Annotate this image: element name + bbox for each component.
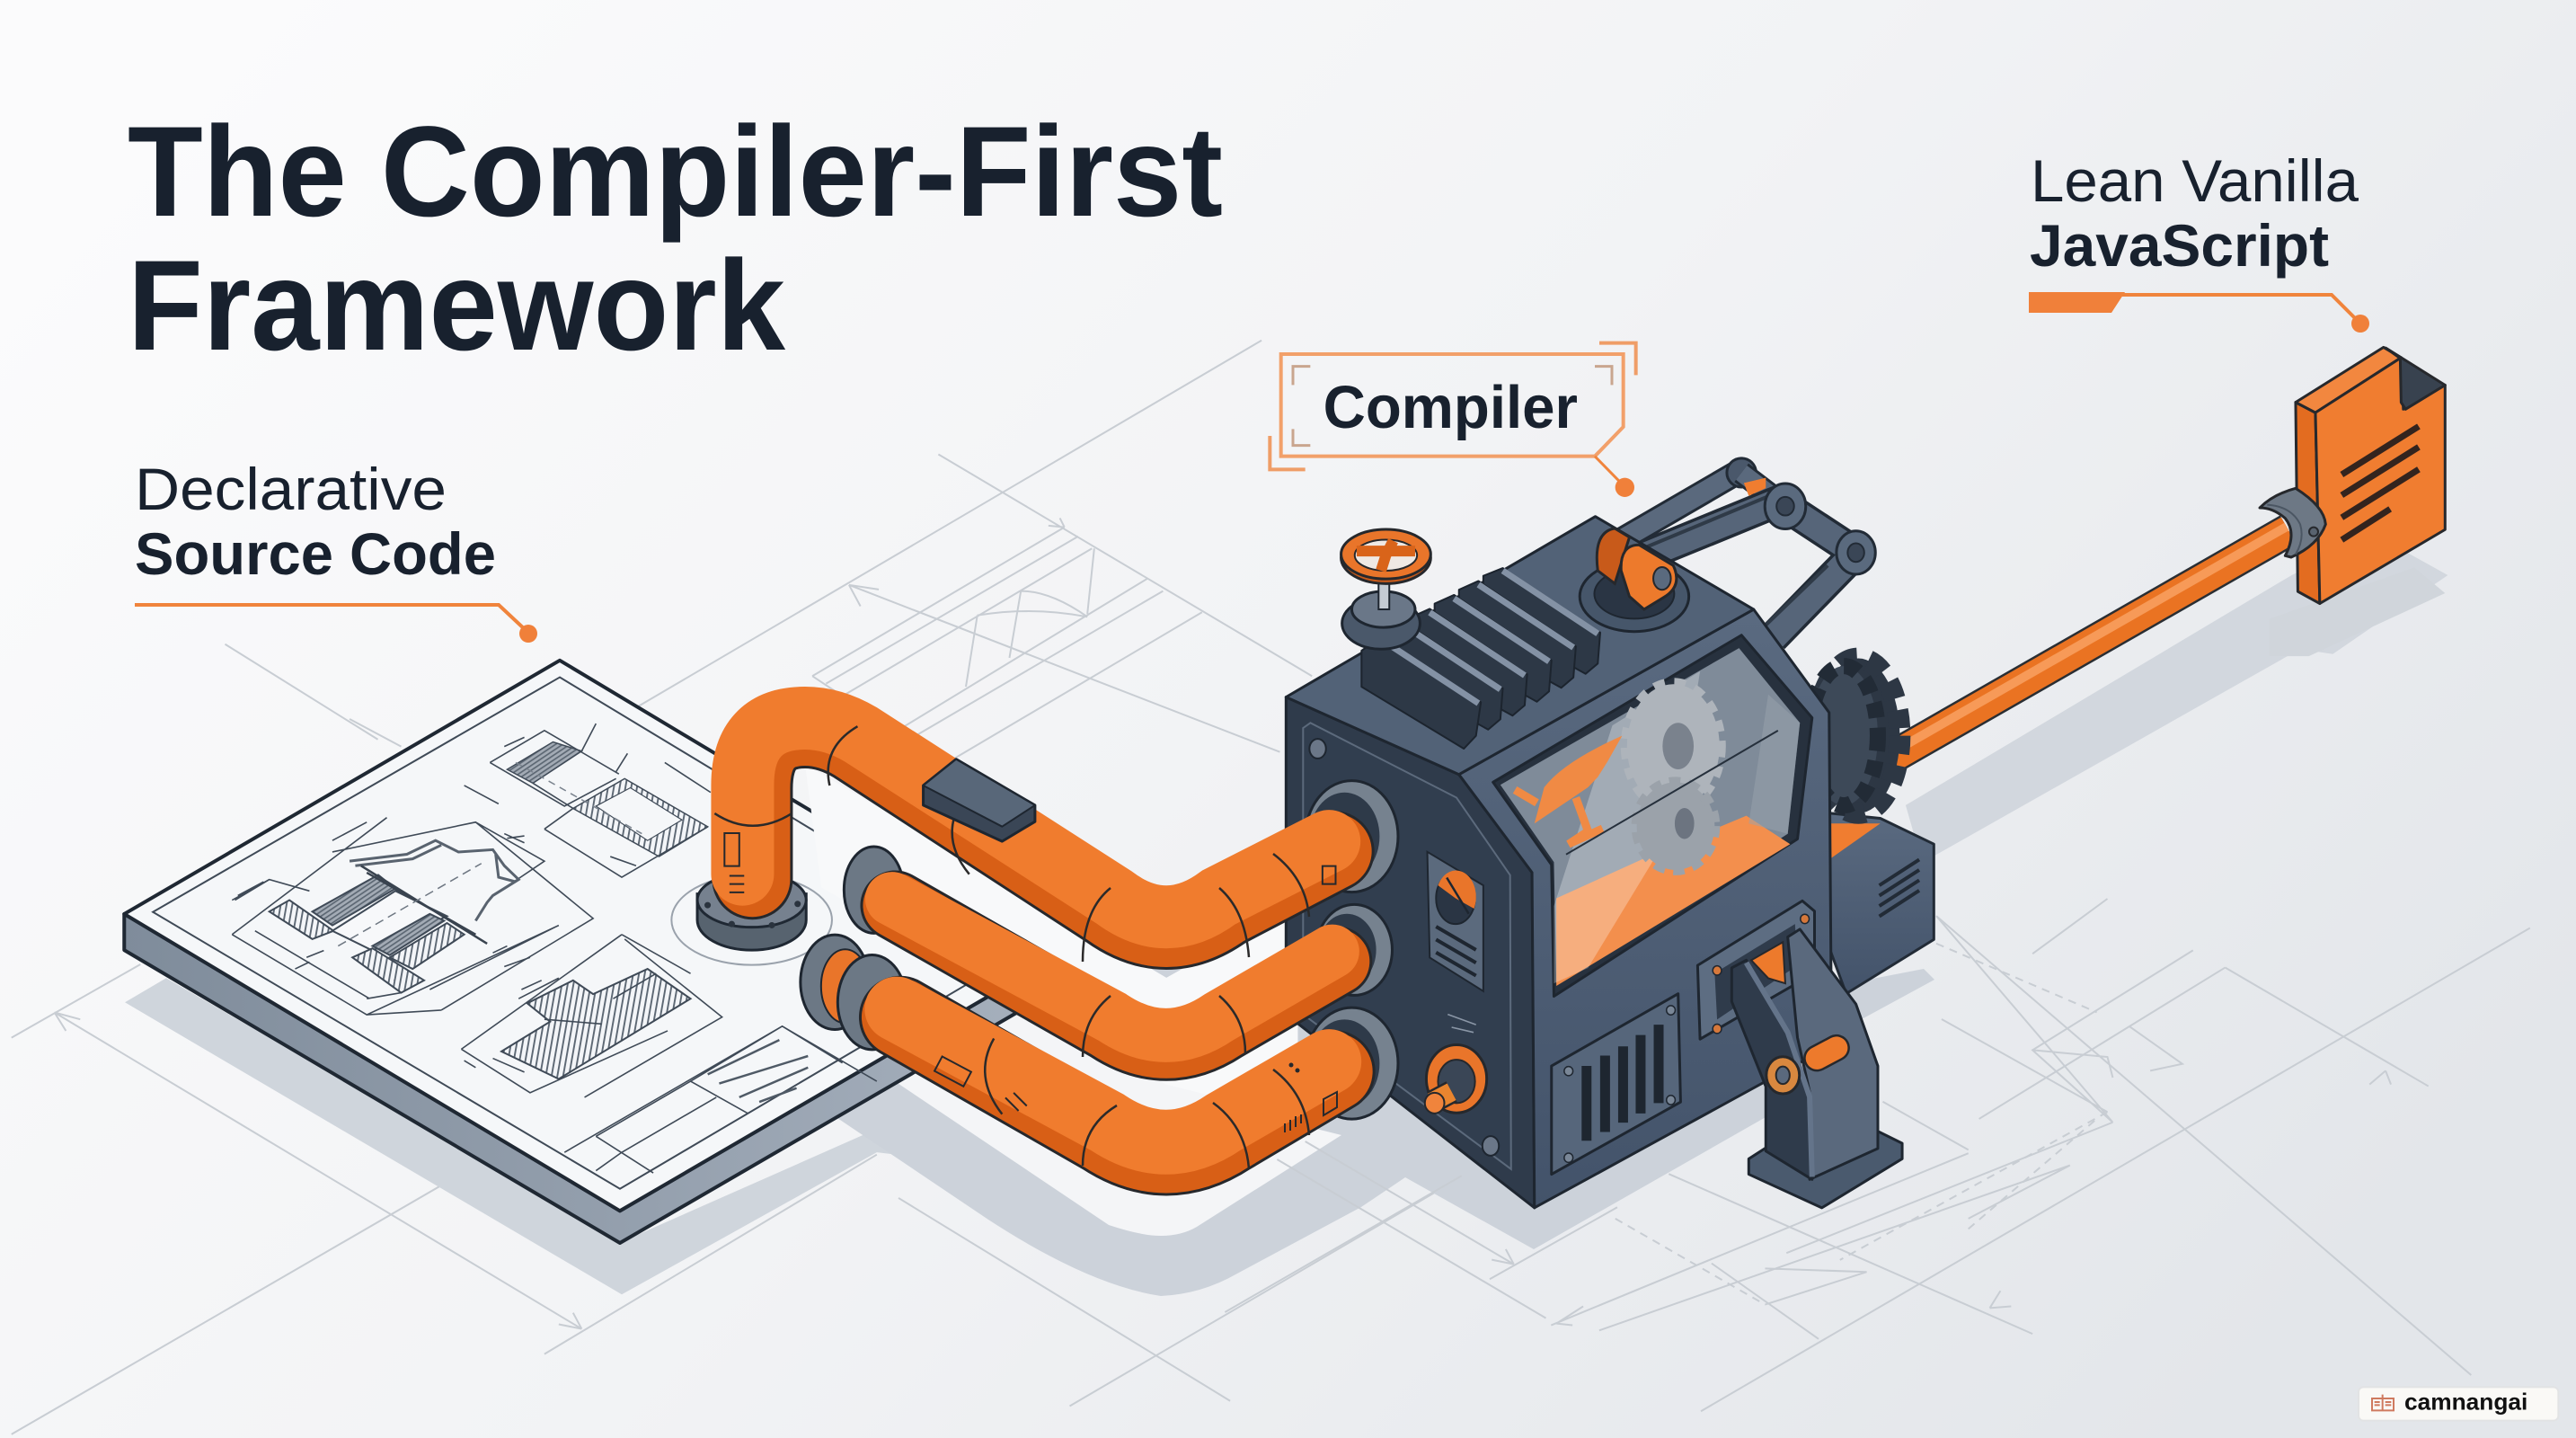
- output document: [2270, 347, 2445, 656]
- shadow: blueprint sheet: [125, 978, 1089, 1294]
- lit gaps between pipes: [805, 764, 1297, 1117]
- panel screws: [1309, 739, 1499, 1156]
- document shadow: [2270, 567, 2445, 656]
- vent grille: [1552, 994, 1680, 1175]
- document top edge: [2296, 347, 2401, 413]
- top actuator: [1580, 528, 1689, 632]
- pipe base flange: [697, 873, 806, 950]
- rear housing: [1829, 813, 1934, 994]
- rod collar: [2260, 488, 2325, 557]
- orange dial knob: [1425, 1044, 1487, 1114]
- window divider: [1566, 731, 1778, 855]
- orange part: [1515, 736, 1622, 844]
- machine: [1286, 458, 1934, 1208]
- pipe: top run: [714, 718, 1335, 929]
- label: Declarative Source Code: [135, 456, 537, 643]
- pipe: middle ring: [844, 847, 904, 933]
- cooling fins: [1361, 568, 1600, 749]
- lever arms: [1731, 929, 1878, 1179]
- watermark: [2359, 1387, 2558, 1421]
- pipe: lower run: [897, 1009, 1334, 1154]
- panel small print: [1447, 1015, 1476, 1033]
- label: Declarative Source Code: Declarative: [135, 456, 447, 522]
- drawing: top right section: [465, 723, 711, 877]
- seams: middle run: [1083, 996, 1245, 1057]
- background drafting lines: [12, 341, 2530, 1434]
- machine top face: [1286, 517, 1754, 775]
- glass highlight: [1554, 671, 1700, 983]
- label: Declarative Source Code: Source Code: [135, 520, 496, 587]
- label: Compiler: [1270, 343, 1636, 497]
- label: Lean Vanilla JavaScript: JavaScript: [2030, 212, 2329, 279]
- output rod: [1858, 527, 2288, 776]
- label: Lean Vanilla JavaScript: [2029, 147, 2369, 333]
- lever pin: [1766, 1048, 1837, 1094]
- sheet surface: [124, 661, 1056, 1211]
- flange: middle port: [1316, 904, 1392, 995]
- rear arm: [1617, 458, 1875, 638]
- blueprint sheet: [124, 661, 1056, 1243]
- floor shadows: [125, 534, 2448, 1296]
- input pipes: [714, 718, 1337, 1168]
- valve wheel: [1341, 529, 1430, 649]
- flange: top port: [1306, 781, 1398, 892]
- title block: [564, 1026, 877, 1173]
- left inset panel: [1303, 723, 1511, 1169]
- title: [128, 101, 1223, 377]
- machine front face: [1459, 609, 1831, 1208]
- upper gear: [1627, 684, 1720, 808]
- shadow: pipes and machine: [788, 899, 1934, 1296]
- title: The Compiler-First: [128, 101, 1223, 244]
- document text lines: [2341, 426, 2419, 540]
- title: Framework: [128, 235, 785, 377]
- seams: top run: [1083, 854, 1309, 962]
- sheet side: [124, 914, 1056, 1243]
- drawing: central section: [232, 818, 593, 1015]
- seams and marks: lower run: [1083, 1062, 1337, 1168]
- shadow: output rod and document: [1906, 534, 2448, 863]
- document side edge: [2296, 403, 2320, 604]
- orange work floor: [1556, 816, 1790, 986]
- watermark: camnangai: [2404, 1388, 2527, 1415]
- label: Lean Vanilla JavaScript: Lean Vanilla: [2031, 147, 2359, 214]
- label: Compiler: Compiler: [1323, 375, 1578, 441]
- lever base: [1748, 1107, 1902, 1208]
- document face: [2315, 358, 2445, 604]
- clamp on top pipe: [924, 759, 1035, 841]
- drawing: lower section: [461, 935, 722, 1097]
- sheet inner border: [153, 678, 1018, 1189]
- lower gear: [1637, 782, 1714, 870]
- rear gear: [1810, 659, 1899, 813]
- gauge panel: [1428, 852, 1483, 991]
- pipe base ring on sheet: [671, 875, 832, 965]
- lit floor band under pipes: [868, 899, 1341, 1236]
- machine left face: [1286, 697, 1535, 1208]
- thin dimension lines over the shadow: [1225, 1141, 1617, 1318]
- lever mount plate: [1697, 901, 1814, 1039]
- viewing window: [1493, 635, 1812, 997]
- folded corner: [2386, 348, 2445, 409]
- pipe: middle run: [892, 899, 1337, 1046]
- icon: open book: [2372, 1395, 2394, 1410]
- flange: bottom port: [1306, 1007, 1398, 1119]
- pipe: lower rear ring and stub: [801, 935, 907, 1050]
